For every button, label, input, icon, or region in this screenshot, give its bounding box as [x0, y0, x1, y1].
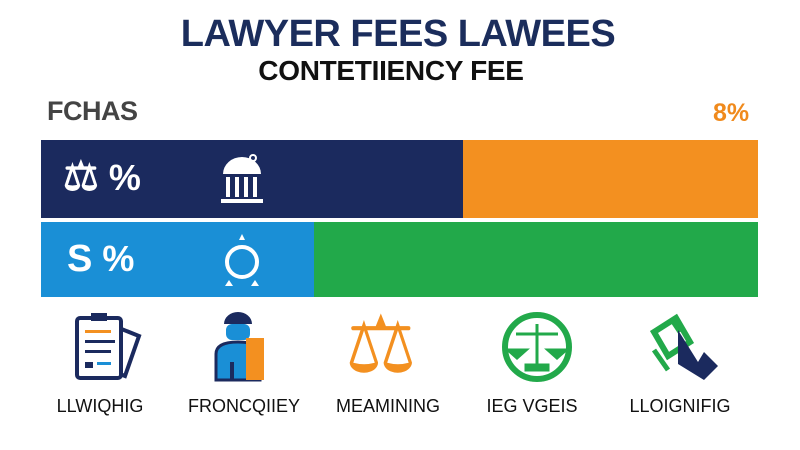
label 3: MEAMINING — [336, 396, 440, 416]
icon: clipboard — [75, 313, 142, 380]
segment: navy — [41, 140, 463, 218]
icon: scales with percent: ⚖ % — [63, 155, 141, 199]
bar row 1 — [41, 140, 758, 218]
icon: green scales circle — [502, 312, 572, 382]
label 2: FRONCQIIEY — [188, 396, 300, 416]
bar row 2 — [41, 222, 758, 297]
label 1: LLWIQHIG — [57, 396, 143, 416]
label: percent: 8% — [713, 99, 749, 127]
title: LAWYER FEES LAWEES — [181, 13, 615, 55]
icon: orange scales: ⚖ — [345, 300, 417, 389]
label 5: LLOIGNIFIG — [629, 396, 731, 416]
subtitle: CONTETIIENCY FEE — [258, 55, 524, 86]
segment: blue — [41, 222, 314, 297]
icon: dollar percent: S % — [67, 238, 134, 280]
label: FCHAS: FCHAS — [47, 96, 138, 126]
icon: worker — [214, 312, 264, 382]
icon: hand with money — [650, 314, 718, 380]
icon: globe — [225, 234, 259, 286]
label 4: IEG VGEIS — [486, 396, 578, 416]
icon: courthouse — [221, 154, 263, 203]
